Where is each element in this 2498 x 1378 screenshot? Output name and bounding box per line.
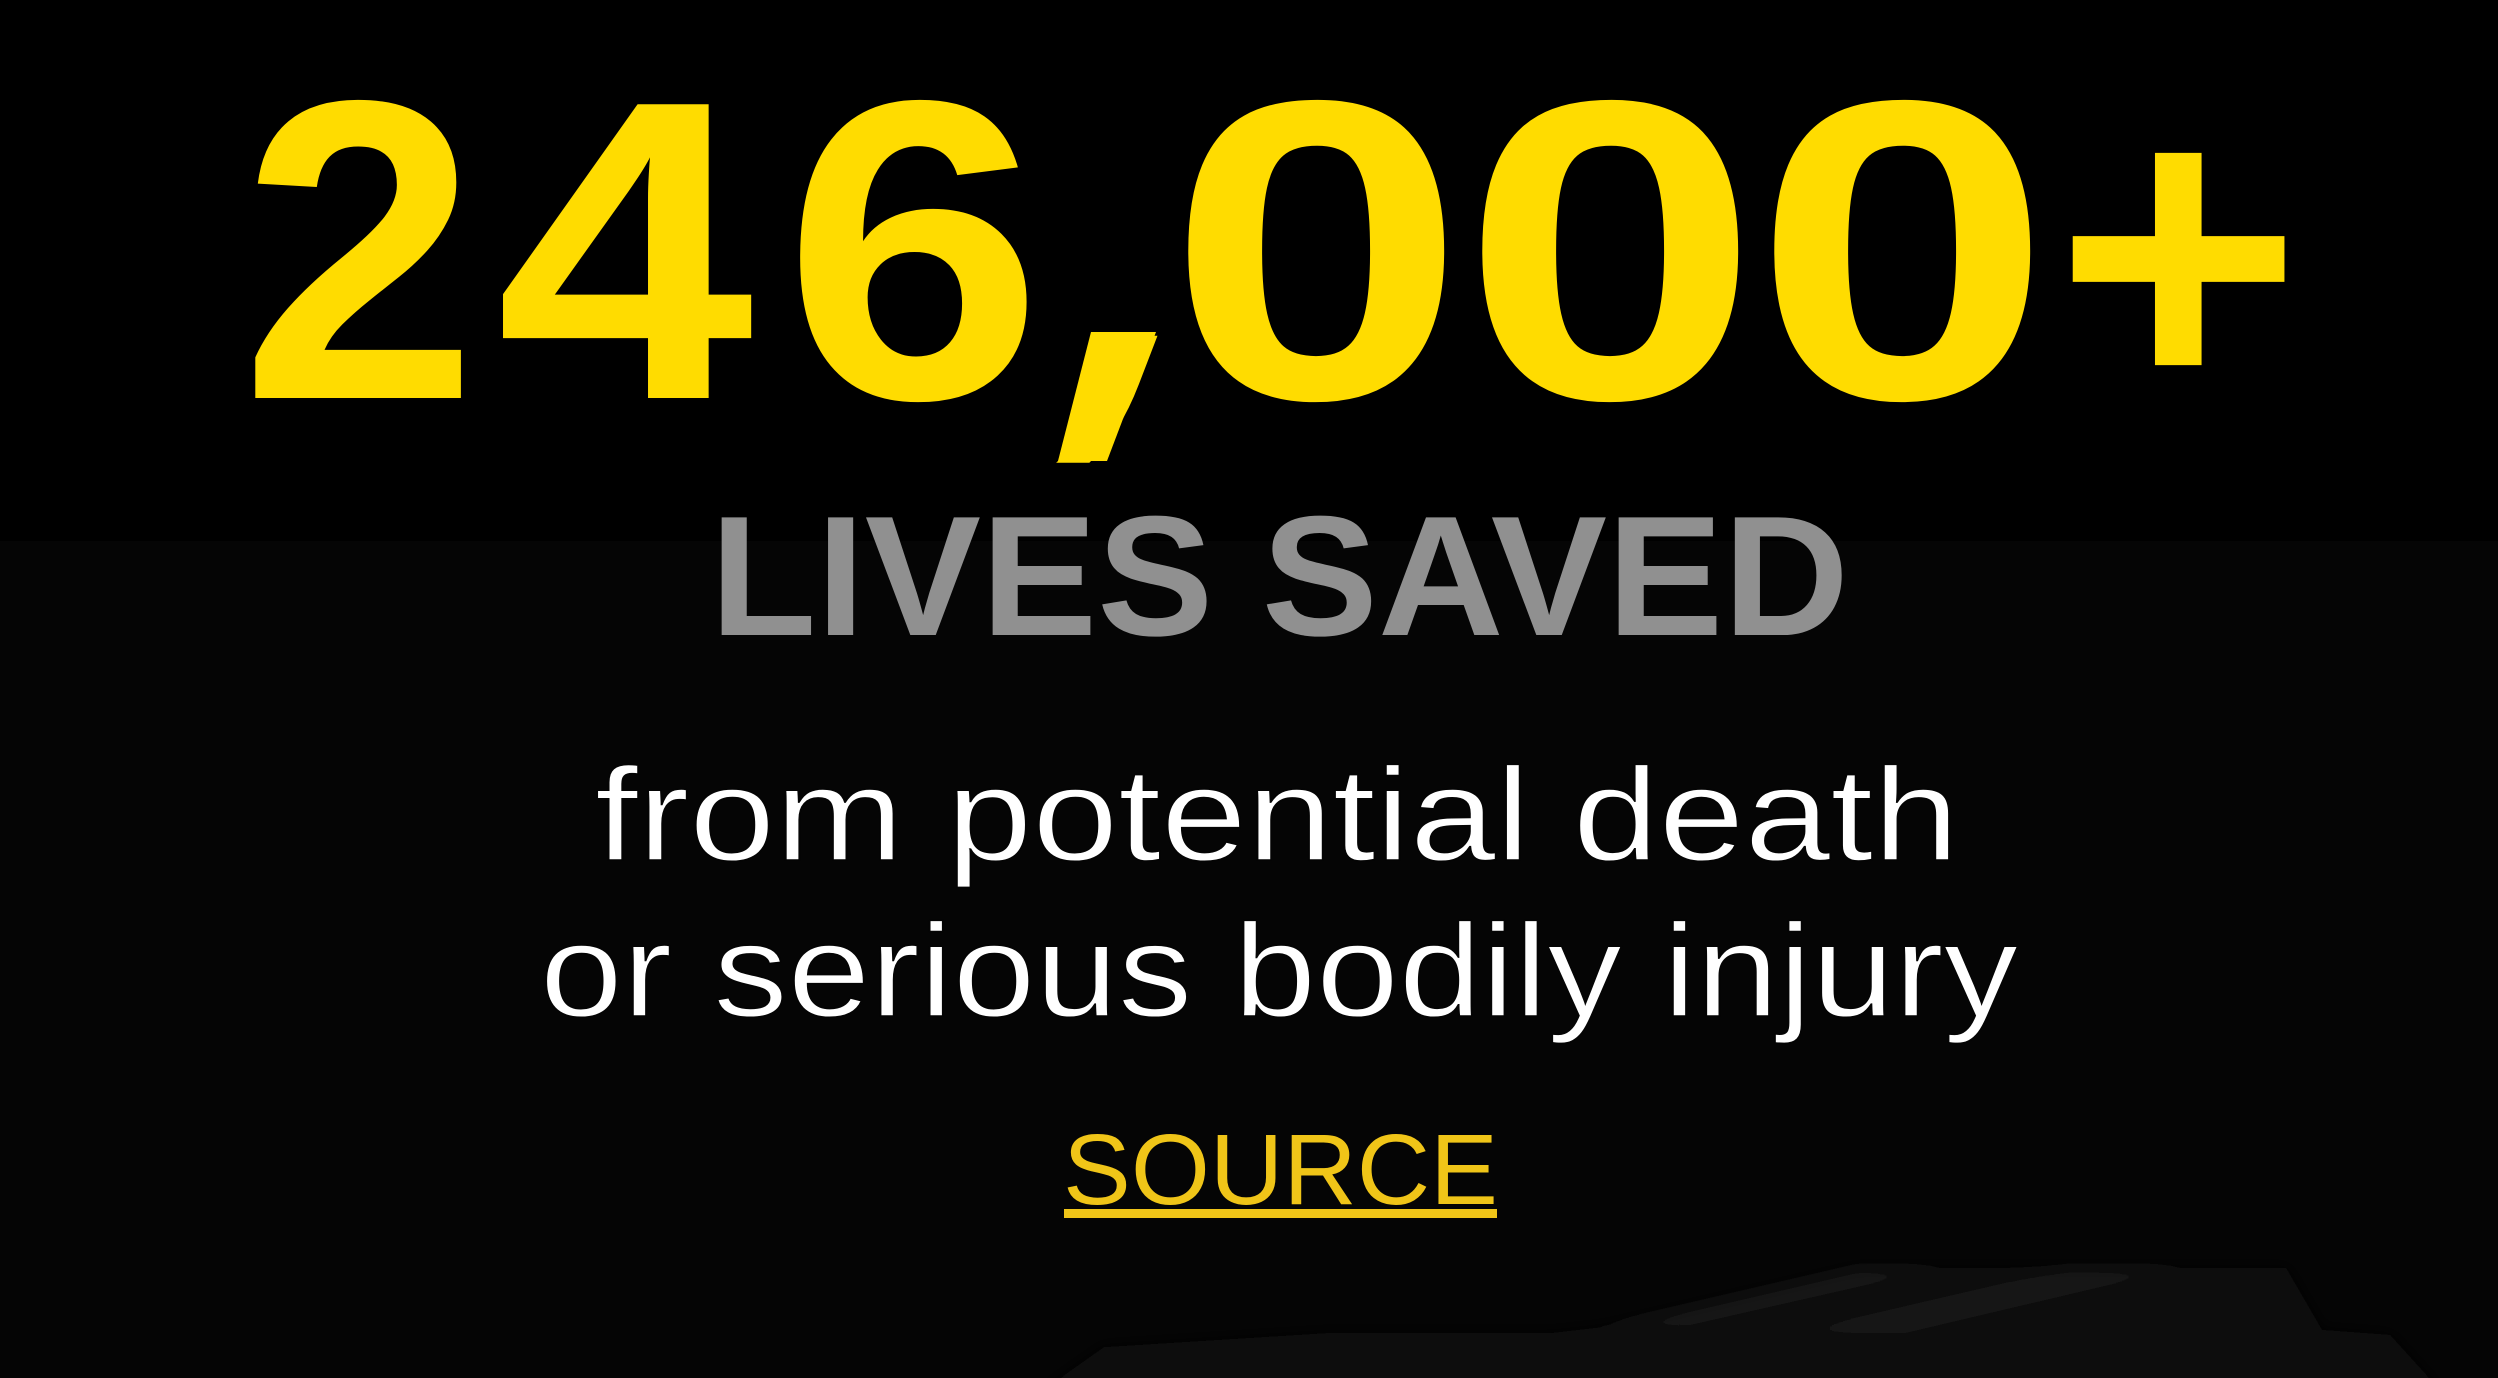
description text [540, 741, 2018, 1044]
headline number: 246,000+: 0 [1753, 11, 2052, 489]
subheading: LIVES SAVED: LIVES SAVED [710, 481, 1849, 672]
headline number: 246,000+: , [1022, 20, 1303, 487]
description text: from potential death [595, 741, 1959, 888]
headline number: 246,000+: 0 [1461, 11, 1760, 489]
background car silhouette [1043, 1268, 2440, 1378]
source link: SOURCE [1063, 1114, 1498, 1226]
headline number: 246,000+: 4 [496, 13, 757, 489]
headline number: 246,000+: 0 [1167, 11, 1466, 489]
description text: or serious bodily injury [540, 897, 2018, 1044]
headline number: 246,000+: + [2055, 21, 2302, 488]
headline number: 246,000+: 6 [783, 11, 1044, 489]
headline number: 246,000+: 2 [240, 12, 478, 489]
headline number: 246,000+ [240, 11, 2302, 489]
